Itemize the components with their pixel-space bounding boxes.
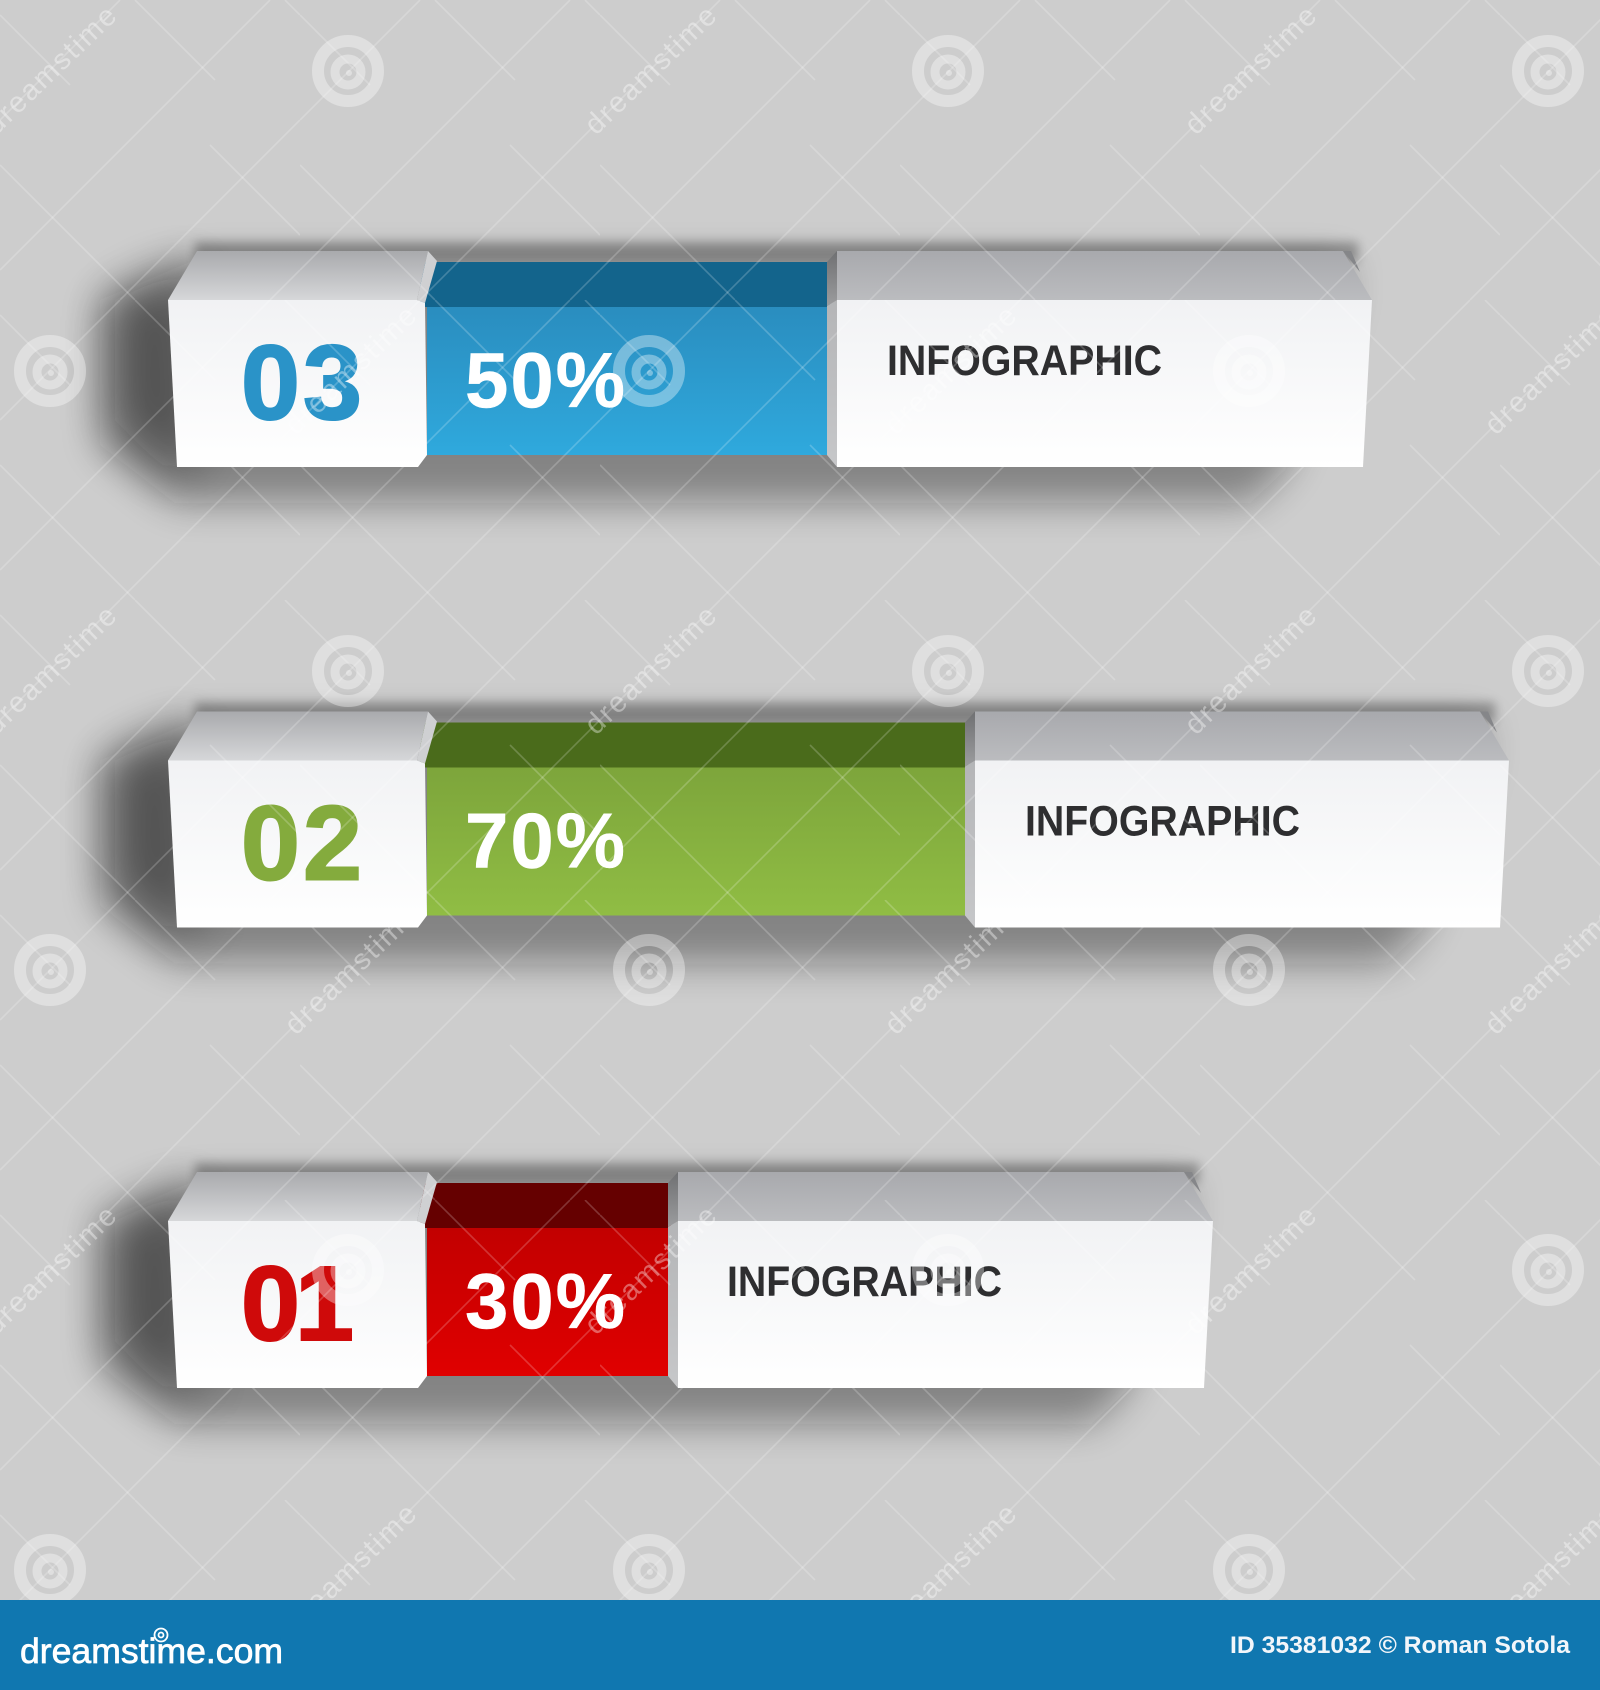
label INFOGRAPHIC: INFOGRAPHIC	[1025, 798, 1300, 846]
footer logo: dreamstime.com	[20, 1632, 283, 1671]
colour bar	[420, 262, 830, 455]
shadow	[100, 1163, 1199, 1424]
number box	[168, 251, 437, 467]
label box	[668, 1172, 1213, 1388]
watermark layer: dreamstime	[879, 300, 1023, 441]
shadow	[100, 702, 1495, 964]
number box	[168, 712, 437, 928]
label INFOGRAPHIC: INFOGRAPHIC	[887, 337, 1162, 385]
watermark layer: dreamstime	[1179, 0, 1323, 141]
shadow	[100, 242, 1358, 503]
number 03: 03	[241, 324, 362, 442]
number 02: 02	[241, 784, 362, 902]
watermark layer: dreamstime	[1179, 600, 1323, 741]
watermark layer: dreamstime	[579, 0, 723, 141]
row: 01 red 30%	[100, 1163, 1213, 1424]
percent 30%: 30%	[465, 1257, 625, 1345]
watermark layer: dreamstime	[579, 600, 723, 741]
image credit: ID 35381032 © Roman Sotola	[1230, 1632, 1570, 1659]
watermark layer: dreamstime	[579, 1200, 723, 1341]
percent 70%: 70%	[465, 796, 625, 884]
watermark layer: dreamstime	[279, 1498, 423, 1639]
colour bar	[420, 722, 968, 916]
number box	[168, 1172, 437, 1388]
watermark layer: dreamstime	[279, 900, 423, 1041]
label box	[827, 251, 1372, 467]
row: 02 green 70%	[100, 702, 1509, 964]
label box	[965, 712, 1509, 928]
watermark layer: dreamstime	[879, 900, 1023, 1041]
logo spiral	[154, 1628, 168, 1642]
watermark layer: dreamstime	[279, 300, 423, 441]
watermark layer: dreamstime	[879, 1498, 1023, 1639]
label INFOGRAPHIC: INFOGRAPHIC	[727, 1258, 1002, 1306]
footer bar	[0, 1600, 1600, 1690]
watermark layer: dreamstime	[1179, 1200, 1323, 1341]
row: 03 blue 50%	[100, 242, 1372, 503]
number 01: 01	[241, 1245, 354, 1363]
percent 50%: 50%	[465, 336, 625, 424]
colour bar	[420, 1183, 671, 1376]
